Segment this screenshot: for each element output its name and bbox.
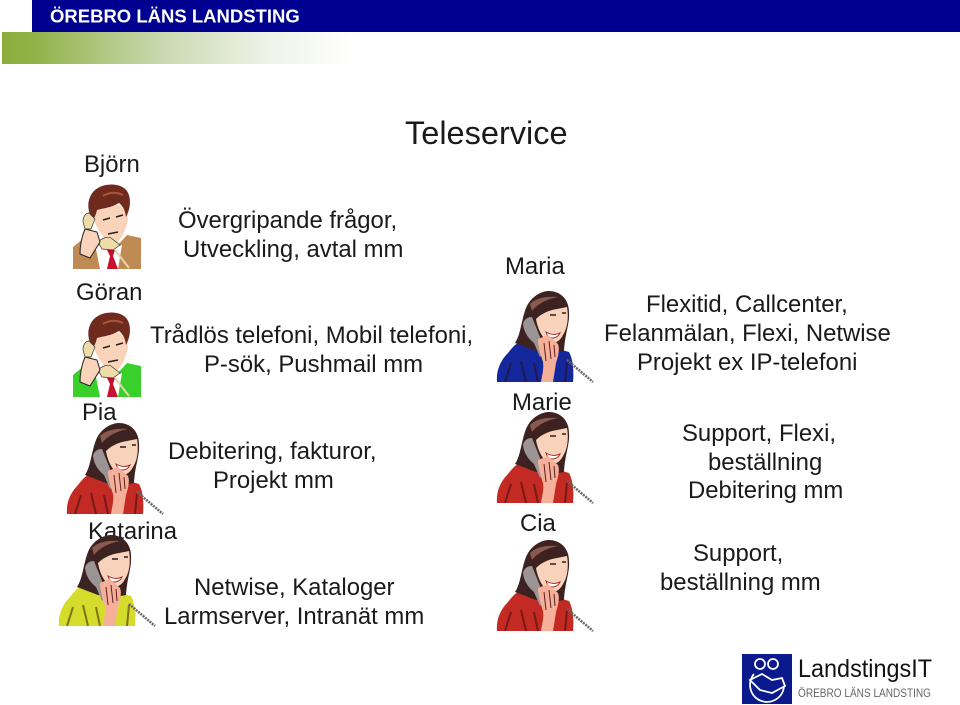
text: Maria's responsibilities: Felanmälan, Flexi, Netwise xyxy=(604,320,891,347)
text: Björn's responsibilities xyxy=(178,207,403,263)
text: Göran's responsibilities: P-sök, Pushmail mm xyxy=(204,351,423,378)
text: Cia's responsibilities xyxy=(660,540,821,596)
text: Maria's responsibilities: Flexitid, Callcenter, xyxy=(646,291,848,318)
text: Marie's responsibilities: Support, Flexi, xyxy=(682,420,836,447)
header bar xyxy=(32,0,960,32)
text: Katarina's responsibilities: Larmserver, Intranät mm xyxy=(164,603,424,630)
icon: woman on phone, red top xyxy=(497,412,593,503)
name: Katarina: Katarina xyxy=(88,518,178,545)
text: Pia's responsibilities: Projekt mm xyxy=(213,467,334,494)
logo subtitle: ÖREBRO LÄNS LANDSTING xyxy=(798,686,931,700)
text: Björn's responsibilities: Utveckling, avtal mm xyxy=(183,236,403,263)
text: Göran's responsibilities xyxy=(150,322,473,378)
text: Maria's responsibilities: Projekt ex IP-telefoni xyxy=(637,349,857,376)
icon: woman on phone, yellow top xyxy=(59,535,155,626)
name: Cia: Cia xyxy=(520,510,557,537)
icon: man on phone, green jacket xyxy=(73,312,141,397)
text: Maria's responsibilities xyxy=(604,291,891,376)
logo mark xyxy=(742,654,792,704)
text: Cia's responsibilities: beställning mm xyxy=(660,569,821,596)
icon: woman on phone, red top xyxy=(67,423,163,514)
name: Maria: Maria xyxy=(505,253,565,280)
name: Marie: Marie xyxy=(512,389,572,416)
name: Björn: Björn xyxy=(84,151,140,178)
logo wordmark: LandstingsIT xyxy=(798,655,932,683)
name: Göran: Göran xyxy=(76,279,142,306)
name: Pia: Pia xyxy=(82,399,117,426)
icon: man on phone, brown jacket xyxy=(73,184,141,269)
text: Marie's responsibilities: beställning xyxy=(708,449,822,476)
text: Pia's responsibilities xyxy=(168,438,376,494)
title: Teleservice xyxy=(405,115,568,151)
header title: ÖREBRO LÄNS LANDSTING xyxy=(50,6,300,26)
text: Cia's responsibilities: Support, xyxy=(693,540,783,567)
green gradient band xyxy=(2,32,352,64)
text: Katarina's responsibilities xyxy=(164,574,424,630)
text: Björn's responsibilities: Övergripande frågor, xyxy=(178,207,397,234)
text: Pia's responsibilities: Debitering, fakturor, xyxy=(168,438,376,465)
text: Katarina's responsibilities: Netwise, Kataloger xyxy=(194,574,395,601)
icon: woman on phone, blue top xyxy=(497,291,593,382)
icon: woman on phone, red top xyxy=(497,540,593,631)
logo: LandstingsIT xyxy=(742,654,932,704)
text: Marie's responsibilities: Debitering mm xyxy=(688,477,843,504)
text: Marie's responsibilities xyxy=(682,420,843,504)
text: Göran's responsibilities: Trådlös telefoni, Mobil telefoni, xyxy=(150,322,473,349)
